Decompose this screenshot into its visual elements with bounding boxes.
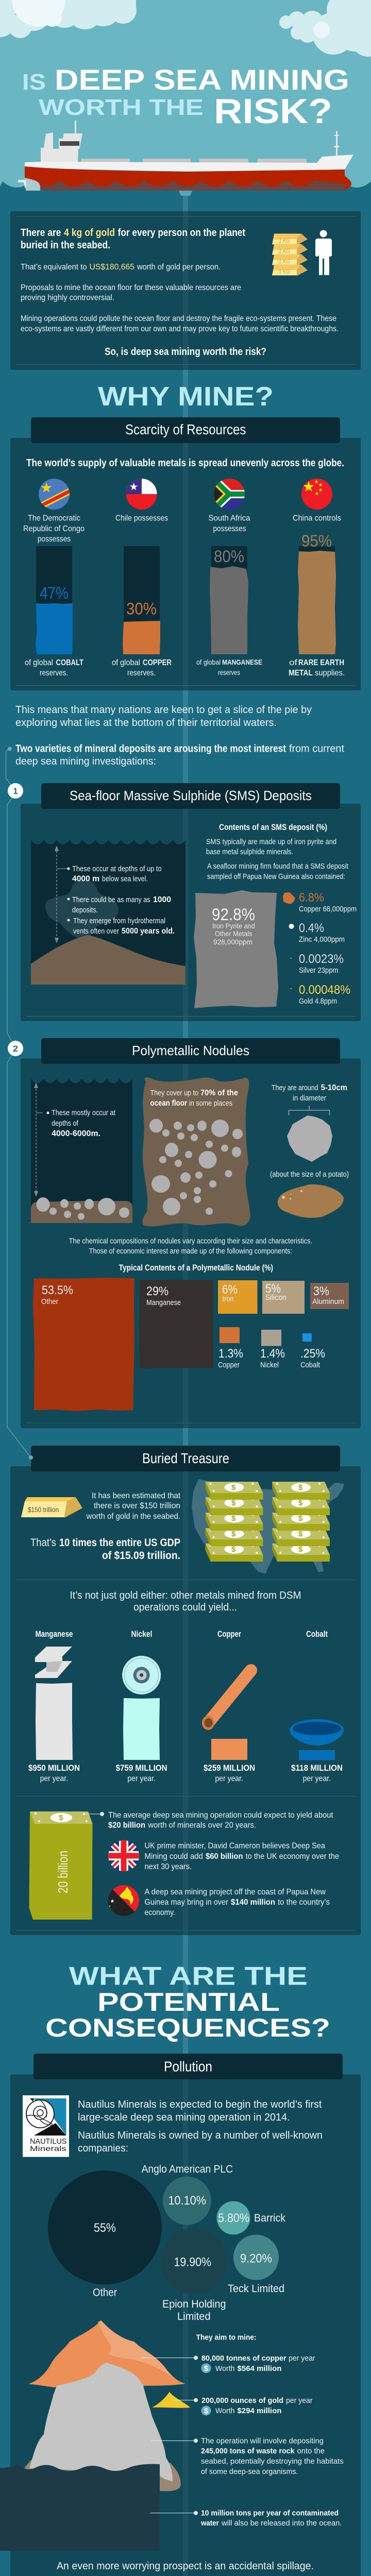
text: depth facts: below sea level. [102,875,148,883]
icon: flag of Chile [126,479,158,510]
block: cobalt .25% [300,1333,325,1369]
text: chemical compositions: The chemical compositions of nodules vary according their size and characteristics. [69,1237,312,1246]
bubble: other 55%: Other [93,2287,117,2299]
panel: sea-floor massive sulphide deposits [21,783,361,1021]
text: country labels: possesses [38,535,71,544]
block: nickel 1.4%: 1.4% [260,1347,285,1361]
chart: yearly yield manganese: Manganese [35,1629,73,1639]
text: metal labels: COBALT [56,658,83,667]
text: other metals intro: operations could yield... [133,1602,237,1613]
callouts: what they aim to mine [141,2333,344,2528]
text: chemical compositions: Typical Contents of a Polymetallic Nodule (%) [119,1263,273,1273]
icon: flag of South Africa [214,479,245,510]
text: depth facts: 1000 [153,895,171,904]
text: SMS contents: Contents of an SMS deposit (%) [219,822,327,832]
text: intro body: Proposals to mine the ocean floor for these valuable resources are [21,283,241,292]
mound: seabed [24,2460,181,2491]
bubble: Anglo American 10.10% [142,2163,233,2225]
callout: copper: per year [289,2354,315,2363]
water: contaminated [0,2464,160,2551]
icon: flag of China [301,479,332,510]
icon: stacks of money: $ [298,1483,303,1492]
diagram: nodule size vs potato: 5-10cm [321,1083,347,1092]
callout: gold: $ [204,2407,209,2415]
block: copper 1.3%: 1.3% [218,1347,243,1361]
block: silicon 5%: 5% [265,1282,281,1296]
icon: stacks of money: $ [231,1514,236,1523]
text: gold estimate: 10 times the entire US GDP [59,1537,180,1549]
text: Nautilus intro: large-scale deep sea mining operation in 2014. [78,2112,290,2123]
bar: copper 30% [123,600,160,654]
block: iron 6%: Iron [223,1295,234,1303]
block: copper 1.3% [218,1327,243,1369]
legend: copper, zinc, silver, gold amounts: 0.00048% [299,983,350,997]
chart: yearly yield cobalt [290,1629,344,1783]
heading: what are the potential consequences: CONSEQUENCES? [45,2013,330,2042]
callout: copper: $564 million [237,2364,281,2373]
block: other 53.5%: 53.5% [42,1283,73,1297]
block: copper 1.3%: Copper [218,1361,240,1369]
text: UK economy: Mining could add [144,1852,203,1861]
legend: copper, zinc, silver, gold amounts: 0.0023% [299,952,344,966]
bubble: Teck 9.20% [228,2235,284,2295]
header: scarcity of resources: Scarcity of Resources [125,421,246,437]
header: polymetallic nodules [41,1038,340,1064]
text: chemical compositions [69,1237,312,1273]
text: metal labels: of global [112,658,140,667]
chart: yearly yield copper [202,1629,255,1783]
icon: stacks of money: $ [298,1514,303,1523]
icon: person [315,230,332,275]
chart: yearly yield cobalt: $118 MILLION [291,1763,343,1773]
header: scarcity of resources [31,417,340,443]
bubble: Epion Holding 19.90% [161,2229,227,2323]
legend: copper, zinc, silver, gold amounts: 6.8% [299,891,324,905]
heading: what are the potential consequences: POTENTIAL [97,1988,280,2016]
header: SMS deposits [41,783,340,809]
text: Papua New Guinea economy [144,1888,330,1917]
callout: waste rock [150,2437,344,2476]
text: intro body: So, is deep sea mining worth the risk? [105,346,266,358]
bubble: Epion Holding 19.90%: 19.90% [174,2256,211,2269]
block: silicon 5%: Silicon [265,1293,286,1302]
text: country labels: South Africa [208,514,250,523]
text: SMS contents: A seafloor mining firm found that a SMS deposit [207,862,349,871]
bubble: Teck 9.20%: Teck Limited [228,2283,284,2295]
text: nations paragraph: deep sea mining investigations: [15,756,156,767]
text: metal labels: METAL [289,669,313,677]
panel: introduction [10,211,361,370]
text: metal labels: supplies. [315,669,345,677]
text: gold headline: There are [21,227,61,239]
text: SMS contents [206,822,349,881]
callout: copper: 80,000 tonnes of copper [201,2354,286,2363]
icon: gold bar $150 trillion [21,1497,82,1518]
text: SMS contents: sampled off Papua New Guinea also contained: [207,872,345,881]
diagram: nodule depth [31,1079,132,1223]
icon: mining ship [18,121,353,196]
text: Papua New Guinea economy: Guinea may bring in over [144,1898,229,1907]
text: gold estimate [30,1492,181,1562]
callout: gold: 200,000 ounces of gold [201,2396,283,2405]
block: nickel 1.4% [260,1330,285,1369]
icon: flag of United Kingdom [108,1840,139,1871]
chart: yearly yield copper: per year. [215,1774,243,1783]
icon: four gold bars [272,234,308,276]
text: nodule depth [52,1109,116,1138]
bubble: Teck 9.20%: 9.20% [240,2251,272,2265]
text: metal labels: of [289,658,298,667]
chart: 20 billion money block [29,1811,104,1920]
text: average yield: worth of minerals over 20 years. [147,1821,256,1830]
block: aluminum 3% [310,1283,349,1309]
icon: stacks of money: $ [298,1499,303,1507]
text: gold estimate: worth of gold in the seabed. [86,1512,180,1521]
text: spillage heading: An even more worrying prospect is an accidental spillage. [57,2561,314,2572]
callout: waste rock: of some deep-sea organisms. [201,2467,298,2476]
text: gold headline: 4 kg of gold [64,227,115,239]
bar chart: share of reserves [36,532,336,654]
text: gold estimate: of $15.09 trillion. [102,1550,180,1562]
logo: Nautilus Minerals: Minerals [30,2144,66,2153]
logo: Nautilus Minerals: NAUTILUS [30,2137,67,2146]
text: metal labels: MANGANESE [222,658,262,666]
block: iron 6%: 6% [222,1283,238,1297]
text: nations paragraph: Two varieties of mineral deposits are arousing the most interest [15,743,286,754]
logo: Nautilus Minerals [23,2095,69,2157]
diagram: nodules on ocean floor: They cover up to [150,1089,198,1097]
text: nodule depth: 4000-6000m. [52,1129,100,1138]
text: intro body: proving highly controversial. [21,294,114,302]
block: manganese 29% [139,1280,213,1368]
chart: iron pyrite rock 92.8%: Iron Pyrite and [212,922,255,930]
chart: yearly yield copper: $259 MILLION [204,1763,255,1773]
text: country labels: The Democratic [28,514,80,523]
pile: gold [152,2392,191,2408]
pile: waste rock [29,2363,173,2481]
block: nickel 1.4%: Nickel [260,1361,279,1369]
diagram: nodules on ocean floor: in some places [189,1099,232,1108]
text: average yield: The average deep sea mining operation could expect to yield about [108,1811,333,1820]
bar: manganese 80%: 80% [214,547,244,566]
text: SMS contents: base metal sulphide minerals. [206,848,293,856]
bubble: Epion Holding 19.90%: Limited [177,2311,211,2323]
diagram: waste rock and ore piles [0,2320,191,2551]
text: metal labels [25,658,345,677]
diagram: nodule size vs potato: (about the size of a potato) [270,1170,349,1179]
callout: copper: Worth [215,2364,235,2373]
text: other metals intro: It’s not just gold either: other metals mined from DSM [70,1590,301,1601]
text: gold headline: buried in the seabed. [21,240,110,251]
bubble: Epion Holding 19.90%: Epion Holding [162,2298,226,2310]
diagram: nodule size vs potato [270,1083,349,1218]
pile: copper [28,2320,185,2387]
text: intro body: US$180,665 [90,263,134,272]
block: other 53.5% [33,1278,134,1411]
icon: four gold bars: 1 KG [279,237,290,244]
title: IS [22,70,46,95]
badge: number 1 [8,783,23,799]
text: average yield: $20 billion [108,1821,145,1830]
chart: yearly yield manganese: $950 MILLION [28,1763,80,1773]
diagram: nodules on ocean floor [142,1077,250,1226]
text: UK economy [144,1841,339,1871]
text: depth facts: deposits. [72,906,98,914]
chart: iron pyrite rock 92.8%: 928,000ppm [213,938,252,946]
icon: stacks of money: $ [231,1530,236,1538]
diagram: nodules on ocean floor: 70% of the [200,1089,238,1097]
chart: yearly yield cobalt: Cobalt [306,1629,328,1639]
map: United States silhouette [192,1479,344,1574]
text: metal labels: RARE EARTH [298,658,344,667]
badge: number 1: 1 [13,786,18,796]
callout: contaminated water: will also be released into the ocean. [221,2519,342,2528]
badge: number 2 [8,1041,23,1056]
legend: copper, zinc, silver, gold amounts: Zinc 4,000ppm [299,935,345,944]
header: SMS deposits: Sea-floor Massive Sulphide (SMS) Deposits [70,788,312,803]
bar: copper 30%: 30% [126,600,157,618]
text: nodule depth: These mostly occur at [52,1109,116,1117]
text: intro body: worth of gold per person. [137,263,221,272]
text: Nautilus intro: Nautilus Minerals is expected to begin the world’s first [78,2099,322,2110]
text: average yield [108,1811,333,1830]
block: other 53.5%: Other [41,1297,58,1306]
header: polymetallic nodules: Polymetallic Nodules [132,1043,249,1058]
text: Nautilus intro: Nautilus Minerals is owned by a number of well-known [78,2130,323,2141]
chart: nodule contents area blocks [33,1278,349,1411]
text: depth facts: 5000 years old. [122,927,175,936]
icon: four gold bars: 1 KG [279,258,290,265]
callout: waste rock: 245,000 tons of waste rock [201,2447,295,2455]
text: Papua New Guinea economy: A deep sea mining project off the coast of Papua New [144,1888,326,1896]
header: pollution [33,2054,343,2079]
diagram: nodule size vs potato: in diameter [293,1094,326,1103]
heading: what are the potential consequences [45,1962,330,2042]
bubble: Barrick 5.80% [216,2201,285,2235]
text: country labels [23,514,341,544]
panel: buried treasure [10,1446,361,1935]
icon: four gold bars: 1 KG [279,268,290,275]
title: RISK? [214,92,332,131]
bubble: Anglo American 10.10%: 10.10% [168,2194,206,2208]
icon: stacks of money: $ [231,1499,236,1507]
text: country labels: Chile possesses [115,514,168,523]
panel: pollution [0,2054,361,2576]
legend: copper, zinc, silver, gold amounts: Gold 4.8ppm [299,997,337,1006]
callouts: what they aim to mine: They aim to mine: [196,2333,257,2342]
block: iron 6% [218,1280,258,1314]
callout: waste rock: The operation will involve depositing [201,2437,324,2445]
chart: 20 billion money block: 20 billion [55,1851,71,1893]
text: Papua New Guinea economy: economy. [144,1908,175,1917]
connector: numbered timeline [6,747,33,1460]
text: metal labels: of global [25,658,53,667]
text: intro body: That’s equivalent to [21,263,87,272]
chart: 20 billion money block: $ [59,1814,63,1822]
text: intro body [21,263,339,358]
icon: stacks of money: $ [231,1483,236,1492]
legend: copper, zinc, silver, gold amounts: Silver 23ppm [299,966,339,975]
icon: stacks of money: $ [298,1545,303,1554]
text: gold headline [21,227,245,251]
chart: yearly yield nickel: per year. [127,1774,156,1783]
diagram: hydrothermal vent depth [31,840,185,985]
icon: stacks of money: $ [231,1545,236,1554]
text: metal labels: of global [196,658,221,666]
text: UK economy: to the UK economy over the [246,1852,339,1861]
callout: contaminated water: water [200,2519,219,2528]
text: other metals intro [70,1590,301,1613]
text: nations paragraph: exploring what lies at the bottom of their territorial waters. [15,717,277,728]
chart: yearly yield manganese [28,1629,80,1783]
callout: contaminated water [150,2509,342,2528]
header: buried treasure: Buried Treasure [142,1450,229,1466]
callout: copper [141,2354,315,2373]
text: nations paragraph [15,704,344,767]
chart: iron pyrite rock 92.8%: Other Metals [215,929,252,938]
chart: iron pyrite rock 92.8%: 92.8% [212,905,255,924]
title [22,63,349,131]
block: manganese 29%: Manganese [146,1298,181,1307]
chart: yearly yield nickel: Nickel [131,1629,153,1639]
panel: polymetallic nodules [21,1038,361,1428]
callout: gold: per year [286,2396,313,2405]
bar: cobalt 47% [36,584,73,654]
text: Nautilus intro [78,2099,323,2154]
text: UK economy: $60 billion [206,1852,243,1861]
icon: four gold bars: 1 KG [279,247,290,255]
text: metal labels: reserves. [40,669,68,677]
chart: yearly yield nickel [116,1629,167,1783]
text: metal labels: COPPER [143,658,172,667]
clouds: top right [279,0,371,57]
text: depth facts: vents often over [73,927,119,936]
bubble: Anglo American 10.10%: Anglo American PLC [142,2163,233,2175]
text: depth facts: 4000 m [72,875,99,883]
heading: what are the potential consequences: WHAT ARE THE [69,1962,308,1991]
text: metal labels: reserves. [127,669,156,677]
chart: yearly yield nickel: $759 MILLION [116,1763,167,1773]
callout: waste rock: seabed, potentially destroying the habitats [201,2457,344,2466]
text: Papua New Guinea economy: to the country’s [278,1898,330,1907]
heading: why mine: WHY MINE? [98,382,274,412]
callout: contaminated water: 10 million tons per year of contaminated [201,2509,339,2517]
text: gold estimate: It has been estimated that [92,1492,181,1500]
diagram: nodule size vs potato: They are around [272,1083,318,1092]
callout: gold: Worth [215,2406,235,2415]
text: gold estimate: there is over $150 trillion [94,1502,180,1511]
text: nations paragraph: from current [289,743,344,754]
clouds: top left [0,0,137,38]
callout: waste rock: onto the [297,2447,325,2455]
block: aluminum 3%: Aluminum [312,1297,344,1306]
text: depth facts: There could be as many as [72,895,150,904]
bar: rare earth 95% [298,532,336,654]
text: UK economy: UK prime minister, David Cameron believes Deep Sea [144,1841,325,1851]
block: cobalt .25%: .25% [300,1347,325,1361]
text: country labels: Republic of Congo [23,524,85,533]
callout: gold [173,2396,313,2415]
header: pollution: Pollution [164,2059,212,2074]
text: depth facts [72,865,175,936]
chart: yearly yield copper: Copper [217,1629,241,1639]
text: depth facts: These occur at depths of up to [72,865,162,873]
block: cobalt .25%: Cobalt [300,1361,321,1369]
icon: stacks of money [205,1482,330,1562]
text: depth facts: They emerge from hydrothermal [73,917,165,925]
icon: flag of Papua New Guinea [108,1885,139,1916]
chart: yearly yield cobalt: per year. [303,1774,331,1783]
block: manganese 29%: 29% [146,1284,168,1298]
bubble: other 55%: 55% [94,2221,116,2235]
chart: iron pyrite rock 92.8% [194,890,278,1008]
text: gold estimate: That’s [30,1537,56,1549]
legend: copper, zinc, silver, gold amounts [283,891,357,1006]
diagram: nodules on ocean floor: ocean floor [150,1099,187,1108]
legend: copper, zinc, silver, gold amounts: 0.4% [299,921,324,935]
block: silicon 5% [262,1281,305,1314]
chart: yearly yield manganese: per year. [40,1774,68,1783]
block: aluminum 3%: 3% [313,1284,329,1298]
bubble: Barrick 5.80%: 5.80% [218,2211,249,2225]
text: chemical compositions: Those of economic interest are made up of the following components: [89,1247,292,1256]
text: Nautilus intro: companies: [78,2143,128,2154]
text: metal labels: reserves [218,668,240,676]
icon: gold bar $150 trillion: $150 trillion [28,1505,59,1514]
chart: ownership bubbles [48,2163,285,2323]
title: DEEP SEA MINING [55,63,349,96]
text: country labels: possesses [213,524,246,533]
text: UK economy: next 30 years. [144,1862,192,1871]
text: nodule depth: depths of [52,1119,79,1128]
text: intro body: Mining operations could pollute the ocean floor and destroy the fragile eco-systems present. These [21,314,336,323]
title: WORTH THE [39,95,204,120]
bar: rare earth 95%: 95% [301,532,332,550]
bubble: Barrick 5.80%: Barrick [254,2212,285,2224]
text: SMS contents: SMS typically are made up of iron pyrite and [206,838,336,846]
text: Papua New Guinea economy: $140 million [231,1898,275,1907]
text: country labels: China controls [293,514,341,523]
callout: gold: $294 million [237,2406,281,2415]
bar: cobalt 47%: 47% [40,584,69,602]
text: nations paragraph: This means that many nations are keen to get a slice of the pie by [15,704,312,716]
badge: number 2: 2 [13,1044,18,1054]
bubble: other 55% [48,2171,162,2299]
legend: copper, zinc, silver, gold amounts: Copper 68,000ppm [299,905,357,913]
header: buried treasure [29,1446,340,1471]
bar: manganese 80% [210,547,248,654]
icon: stacks of money: $ [298,1530,303,1538]
icon: flag of DR Congo [39,479,70,510]
text: gold headline: for every person on the planet [118,227,245,239]
panel: scarcity of resources [10,417,361,690]
callout: copper: $ [204,2364,209,2373]
